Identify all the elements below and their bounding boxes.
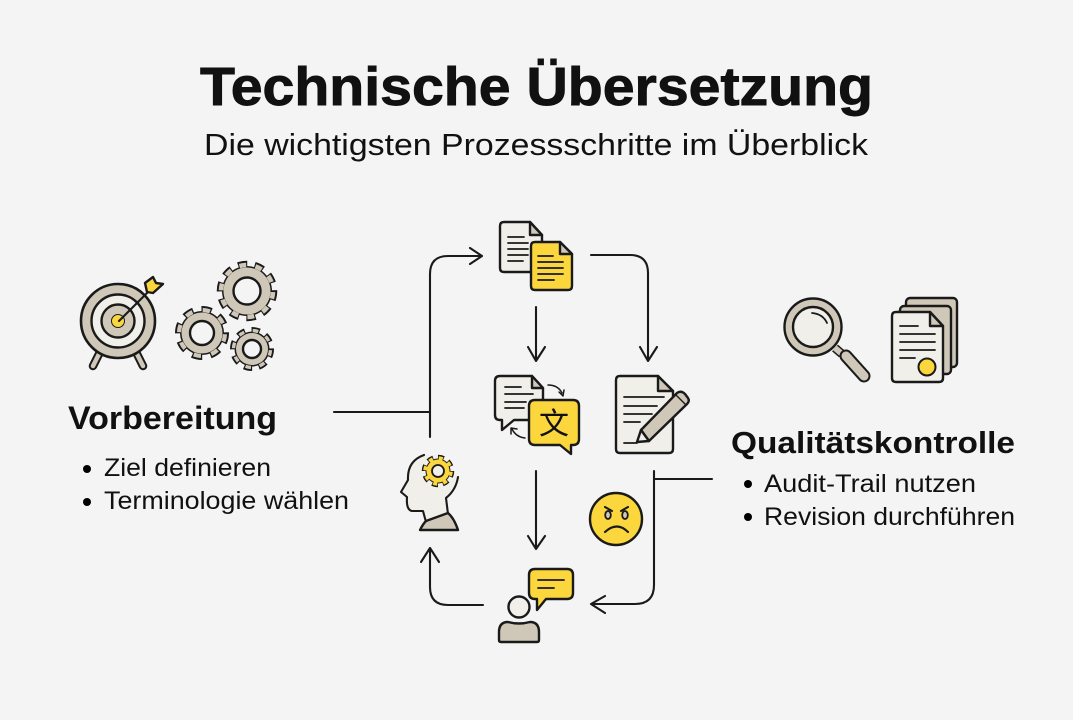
connector: Qualitätskontrolle to cycle (654, 478, 712, 480)
arrow: review to person (591, 471, 654, 613)
icon: angry face (590, 493, 642, 545)
icon: small gear (234, 330, 270, 368)
heading: Vorbereitung: Vorbereitung (68, 400, 277, 436)
list: Vorbereitung: Terminologie wählen (104, 487, 349, 515)
arrow: translation to person (528, 471, 545, 549)
connector: Vorbereitung to cycle (334, 411, 430, 413)
list: Qualitätskontrolle (744, 470, 1015, 531)
arrow: person to head (421, 548, 483, 605)
list: Vorbereitung: Ziel definieren (104, 454, 271, 482)
icon: target with arrow (81, 277, 163, 366)
arrow: documents to translation (528, 307, 545, 361)
icon: certified document stack (892, 298, 957, 382)
icon: large gear (221, 265, 273, 317)
list: Qualitätskontrolle: Audit-Trail nutzen (764, 470, 976, 498)
title: Technische Übersetzung (200, 57, 873, 117)
list: Vorbereitung (83, 454, 349, 515)
icon: medium gear (179, 310, 225, 356)
arrow: head to documents (430, 248, 482, 437)
subtitle: Die wichtigsten Prozessschritte im Überblick (204, 127, 869, 162)
heading: Qualitätskontrolle: Qualitätskontrolle (731, 425, 1015, 460)
icon: person with speech bubble (499, 569, 573, 642)
icon: head with gear (401, 455, 458, 530)
icon: magnifying glass (784, 298, 864, 376)
arrow: documents to review note (591, 255, 657, 361)
icon: document with pencil (616, 376, 689, 453)
icon: source and target documents (500, 222, 572, 290)
icon: translation bubbles: 文 (539, 399, 569, 443)
icon: translation bubbles (495, 376, 579, 454)
list: Qualitätskontrolle: Revision durchführen (764, 503, 1015, 531)
